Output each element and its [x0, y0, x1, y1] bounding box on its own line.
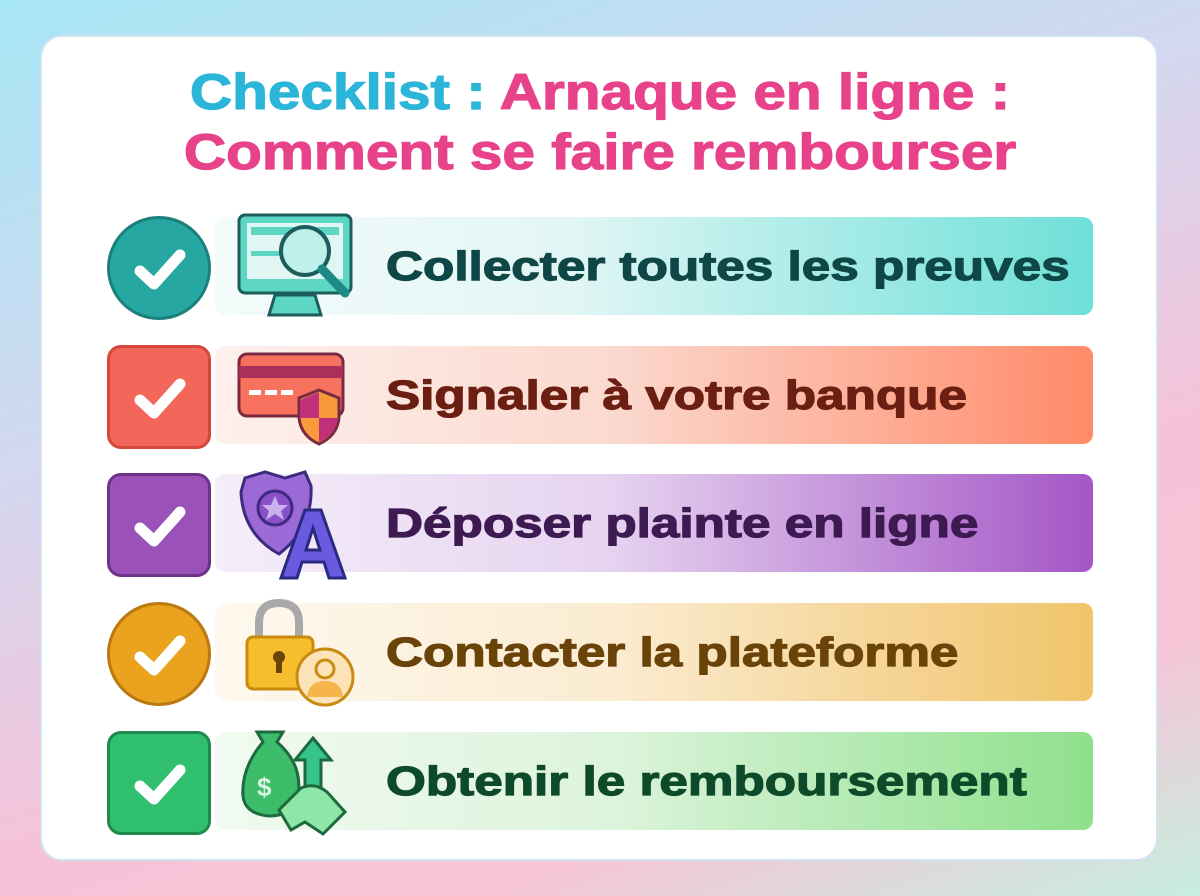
- row 3: déposer plainte: [107, 470, 1093, 580]
- row 1: collecter preuves: Collecter toutes les preuves: [386, 243, 1070, 289]
- title: Checklist : Arnaque en ligne :: [190, 64, 1010, 120]
- title: [184, 64, 1016, 180]
- row 5: obtenir remboursement: Obtenir le remboursement: [386, 758, 1027, 804]
- icon: lock user: [246, 599, 354, 706]
- checkbox 4: [107, 602, 211, 706]
- checkbox 2: [107, 345, 211, 449]
- row 2: signaler banque: Signaler à votre banque: [386, 372, 967, 418]
- title: Comment se faire rembourser: [184, 124, 1016, 180]
- icon: money bag handshake: [241, 730, 347, 836]
- checkbox 3: [107, 473, 211, 577]
- icon: card shield: [238, 352, 344, 446]
- row 1: collecter preuves: [107, 214, 1093, 320]
- icon: money bag handshake: $: [257, 772, 272, 802]
- row 5: obtenir remboursement: [107, 730, 1093, 836]
- row 4: contacter plateforme: [107, 599, 1093, 706]
- row 3: déposer plainte: Déposer plainte en ligne: [386, 500, 978, 546]
- row 4: contacter plateforme: Contacter la plateforme: [386, 629, 958, 675]
- icon: police badge A: [240, 470, 348, 580]
- checkbox 5: [107, 731, 211, 835]
- checkbox 1: [107, 216, 211, 320]
- row 2: signaler banque: [107, 345, 1093, 449]
- icon: monitor magnifier: [238, 214, 352, 316]
